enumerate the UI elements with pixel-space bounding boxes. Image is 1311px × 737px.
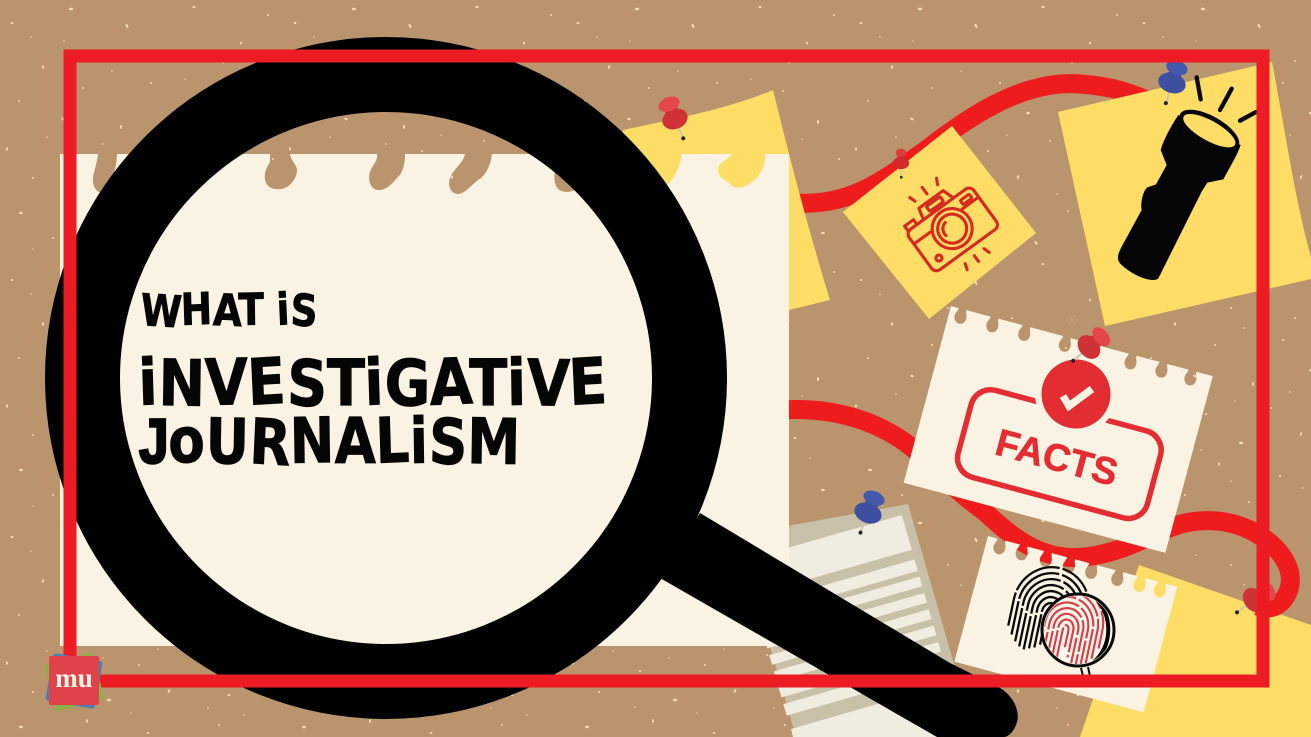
icon: fingerprint under magnifier [1004, 560, 1115, 676]
sticky note: camera [843, 126, 1036, 319]
pin: red on yellow note [654, 93, 696, 145]
yellow note bottom right [1080, 565, 1311, 737]
title [137, 284, 609, 480]
main paper with punched holes [60, 154, 789, 646]
red string top [795, 84, 1155, 203]
pin: red on facts note [1063, 322, 1115, 372]
document sheet [738, 504, 975, 737]
red frame [70, 56, 1263, 681]
pin: blue top [1152, 57, 1192, 109]
pin: red on right yellow note [1228, 576, 1280, 624]
fingerprint note [954, 536, 1177, 712]
red string lower [780, 409, 1290, 608]
pin: blue on document [846, 486, 890, 540]
icon: flashlight [1118, 77, 1256, 280]
sticky note: flashlight [1058, 57, 1311, 326]
logo: mu [44, 653, 104, 711]
facts note [904, 306, 1213, 553]
badge outline [953, 385, 1166, 523]
yellow note behind paper [623, 90, 830, 310]
icon: camera [890, 164, 1009, 286]
logo: mu: mu [55, 663, 93, 693]
pin: small red [893, 149, 909, 179]
title line: investigative: iNVESTiGATiVE [137, 345, 609, 422]
title line: what is: WHAT iS [139, 284, 319, 338]
magnifying glass ring [82, 74, 690, 682]
title line: journalism: JoURNALiSM [139, 404, 521, 480]
badge check icon [1042, 360, 1110, 428]
facts label: FACTS [991, 422, 1122, 495]
magnifying glass handle [660, 513, 1018, 737]
badge circle [1026, 344, 1126, 444]
